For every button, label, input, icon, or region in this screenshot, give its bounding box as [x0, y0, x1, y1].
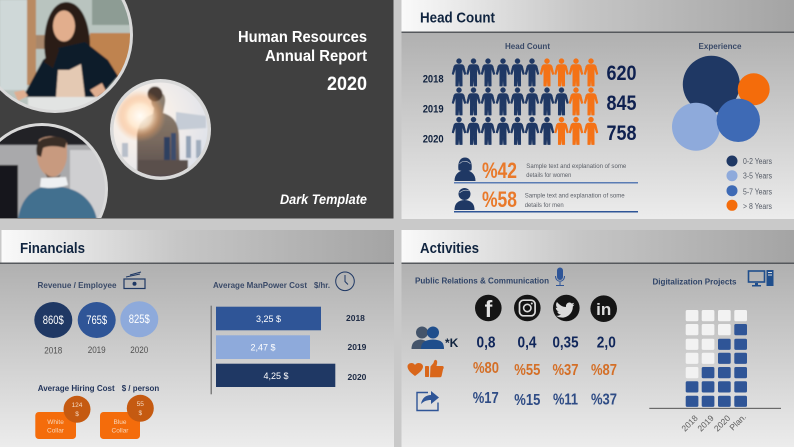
card: white collar cost: 124	[72, 402, 83, 409]
card: white collar cost: $	[75, 411, 79, 418]
icon: microphone	[556, 268, 564, 286]
stat: men share: Sample text and explanation of some	[525, 192, 625, 200]
stat: women share: details for women	[526, 172, 572, 179]
pictogram chart: head count by year	[423, 59, 637, 146]
legend: experience: 3-5 Years	[743, 172, 772, 181]
icon: facebook: f	[485, 296, 493, 322]
stat: women share: Sample text and explanation of some	[526, 163, 627, 170]
stat: women share: %42	[482, 158, 517, 183]
card: white collar cost	[35, 396, 90, 439]
heading: Experience: Experience	[698, 41, 742, 51]
bubbles: revenue per employee: 2020	[130, 345, 148, 356]
bubbles: revenue per employee: 765$	[86, 313, 107, 327]
stat: men share: details for men	[525, 202, 564, 209]
panel: financials slide	[0, 230, 394, 447]
row: followers values: 0,8	[476, 334, 496, 352]
stat: men share	[454, 187, 638, 212]
bubbles: revenue per employee: 2019	[88, 345, 106, 356]
row: shares values: %37	[591, 392, 617, 408]
pictogram chart: head count by year: 845	[606, 92, 637, 115]
bar chart: average manpower cost: 2,47 $	[250, 342, 276, 352]
legend: experience: 0-2 Years	[743, 157, 772, 166]
row: followers values	[476, 334, 616, 352]
icon: banknotes	[124, 272, 145, 288]
stat: men share: %58	[482, 187, 517, 212]
chart: digitalization projects grid: Plan.	[727, 412, 748, 432]
chart: digitalization projects grid	[649, 310, 781, 433]
bar chart: average manpower cost: 2020	[348, 372, 367, 382]
card: blue collar cost: Blue	[113, 419, 127, 426]
card: white collar cost: White	[47, 419, 64, 426]
chart: digitalization projects grid: 2018	[679, 413, 700, 433]
heading: Revenue / Employee: Revenue / Employee	[38, 280, 117, 290]
title: Human Resources Annual Report: Human Resources	[238, 29, 367, 46]
header: Head Count: Head Count	[420, 10, 495, 26]
bar chart: average manpower cost: 2019	[348, 342, 367, 352]
photo: man in blue sweater	[0, 123, 108, 218]
icon: share	[417, 391, 439, 410]
pictogram chart: head count by year: 2020	[423, 134, 444, 146]
row: likes values: %55	[514, 362, 541, 379]
heading: Average ManPower Cost: Average ManPower Cost	[213, 280, 307, 290]
header: Activities: Activities	[420, 240, 479, 257]
icon: heart and thumbs up	[408, 360, 444, 377]
row: followers values: 0,35	[552, 334, 579, 352]
legend: experience: 5-7 Years	[743, 188, 772, 196]
icon: twitter	[553, 295, 580, 321]
bar chart: average manpower cost: 4,25 $	[263, 371, 289, 381]
bubbles: revenue per employee: 860$	[43, 313, 64, 327]
title: Human Resources Annual Report: 2020	[327, 74, 367, 95]
pictogram chart: head count by year: 2018	[423, 74, 444, 86]
label: thousands unit: *K	[445, 336, 459, 350]
panel: head count slide	[402, 0, 794, 219]
header: Activities	[402, 230, 794, 264]
row: likes values: %80	[473, 360, 499, 377]
bar chart: average manpower cost	[210, 306, 367, 394]
card: white collar cost: Collar	[47, 428, 65, 434]
bubbles: revenue per employee: 825$	[129, 312, 150, 326]
bar chart: average manpower cost: 2018	[346, 313, 365, 323]
icon: clock	[336, 272, 354, 291]
bubbles: revenue per employee: 2018	[44, 346, 62, 356]
card: blue collar cost: $	[138, 410, 142, 417]
row: shares values: %17	[473, 390, 499, 407]
photo: businesswoman at desk	[0, 0, 133, 218]
title: Human Resources Annual Report: Annual Report	[265, 48, 367, 65]
subtitle: Dark Template: Dark Template	[280, 191, 367, 207]
icon: linkedin	[590, 295, 617, 322]
row: followers values: 2,0	[597, 334, 616, 352]
legend: experience: > 8 Years	[743, 202, 772, 211]
bubble chart: experience	[672, 56, 770, 151]
icon: computer	[748, 270, 774, 286]
row: followers values: 0,4	[518, 334, 537, 352]
bar chart: average manpower cost: 3,25 $	[256, 314, 281, 324]
icon: instagram	[514, 295, 541, 321]
row: shares values	[473, 390, 617, 409]
panel: activities slide	[402, 230, 794, 447]
heading: Public Relations and Communication: Public Relations & Communication	[415, 276, 549, 286]
chart: digitalization projects grid: 2019	[695, 413, 716, 433]
pictogram chart: head count by year: 2019	[423, 104, 444, 116]
title: Human Resources Annual Report	[238, 29, 367, 95]
heading: Average Hiring Cost: Average Hiring Cost	[38, 383, 115, 393]
icon: followers	[412, 326, 444, 349]
card: blue collar cost	[100, 395, 154, 439]
row: likes values	[473, 360, 617, 379]
icon: woman	[454, 158, 476, 181]
heading: Average Hiring Cost	[38, 383, 159, 393]
panel: cover slide	[0, 0, 394, 218]
header: Head Count	[402, 0, 794, 33]
bubbles: revenue per employee	[34, 301, 158, 356]
card: blue collar cost: 55	[137, 401, 144, 408]
header: Financials: Financials	[20, 240, 85, 257]
row: likes values: %37	[552, 362, 578, 379]
card: blue collar cost: Collar	[112, 428, 129, 434]
row: likes values: %87	[591, 362, 617, 379]
heading: Head Count chart: Head Count	[505, 41, 550, 51]
chart: digitalization projects grid: 2020	[712, 413, 732, 433]
icon: linkedin: in	[596, 300, 611, 319]
row: shares values: %11	[553, 392, 578, 408]
pictogram chart: head count by year: 620	[606, 62, 636, 85]
icon: man	[454, 188, 474, 210]
legend: experience	[726, 156, 772, 211]
heading: Average ManPower Cost: $/hr.	[314, 280, 330, 290]
stat: women share	[454, 158, 638, 184]
heading: Average Hiring Cost: $ / person	[122, 383, 159, 393]
icon: facebook	[475, 295, 502, 322]
photo: woman overlooking city	[110, 79, 211, 180]
pictogram chart: head count by year: 758	[606, 122, 637, 145]
row: shares values: %15	[514, 392, 541, 409]
header: Financials	[0, 230, 394, 264]
heading: Digitalization Projects: Digitalization Projects	[652, 278, 737, 286]
